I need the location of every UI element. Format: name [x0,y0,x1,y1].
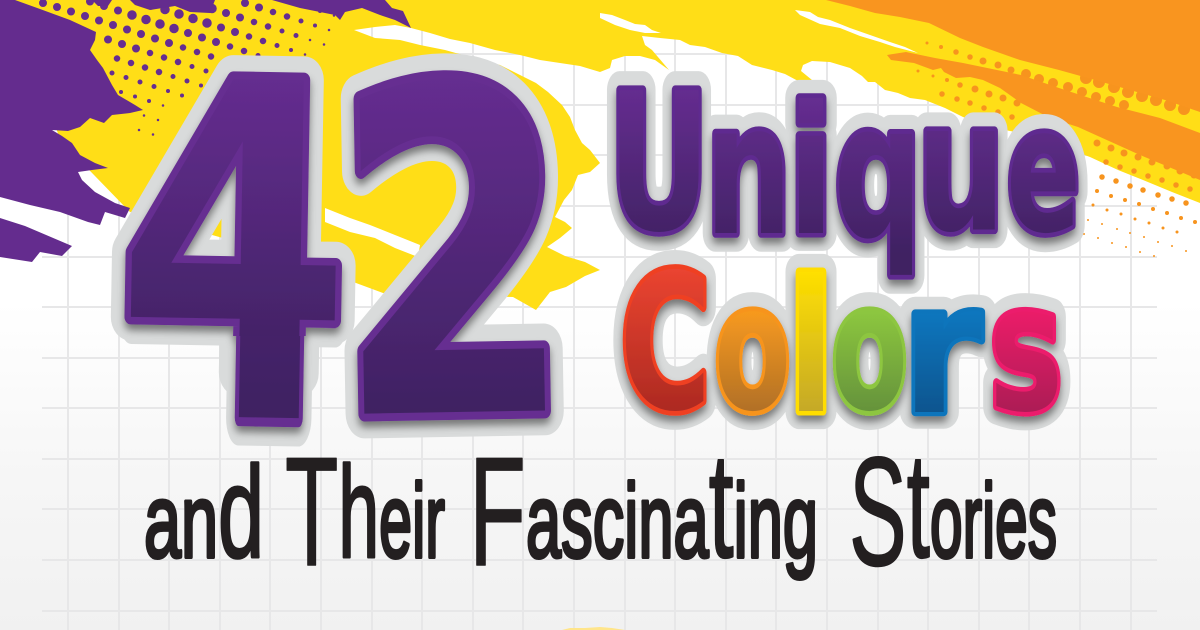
word: Unique: u [917,64,1005,273]
yellow paint brush stroke [15,0,1200,310]
word: Colors: l [788,242,834,455]
number 42: 2 [330,0,576,521]
word: Unique: u [917,64,1005,273]
subtitle: and Their Fascinating Stories: F [469,425,526,598]
word: Colors: C [620,234,711,453]
purple paint brush strokes [0,0,411,262]
subtitle: and Their Fascinating Stories: and [144,439,264,585]
word: Colors: o [714,247,791,450]
word: Unique: q [834,64,922,281]
word: Colors: r [902,246,982,455]
number 42: 2 [330,0,576,521]
word: Colors: C [620,234,711,453]
word: Colors: s [989,247,1063,451]
subtitle: and Their Fascinating Stories: ting [709,421,874,589]
word: Unique: U [608,53,710,275]
subtitle: and Their Fascinating Stories: ories [930,463,1158,580]
purple halftone dots [43,2,334,134]
word: Colors: r [902,246,982,455]
word: Colors: o [831,247,908,450]
orange paint brush strokes [826,0,1200,180]
word: Unique: e [1006,70,1081,272]
white streaks in yellow paint [325,10,918,257]
word: Unique: n [705,64,792,276]
subtitle: and Their Fascinating Stories [144,421,1057,598]
word: Unique: i [788,69,834,276]
number 42: 4 [113,0,356,469]
subtitle: and Their Fascinating Stories: h [338,439,379,585]
number 42 [110,53,564,446]
subtitle: and Their Fascinating Stories: ascina [526,463,709,580]
orange halftone dots on yellow and white [918,43,1195,256]
subtitle: and Their Fascinating Stories: t [907,421,930,589]
word: Unique: e [1006,70,1081,272]
subtitle: and Their Fascinating Stories: S [849,425,907,598]
word: Unique: n [705,64,792,276]
word: Colors: o [831,247,908,450]
word: Unique [608,53,1081,281]
subtitle: and Their Fascinating Stories: T [285,425,338,598]
word: Unique: q [834,64,922,281]
word: Colors [620,234,1063,455]
word: Colors: l [788,242,834,455]
small yellow paint speck at bottom [562,627,625,630]
word: Unique: i [788,69,834,276]
subtitle: and Their Fascinating Stories: eir [379,463,496,580]
word: Unique: U [608,53,710,275]
number 42: 4 [113,0,356,469]
word: Colors: s [989,247,1063,451]
word: Colors: o [714,247,791,450]
